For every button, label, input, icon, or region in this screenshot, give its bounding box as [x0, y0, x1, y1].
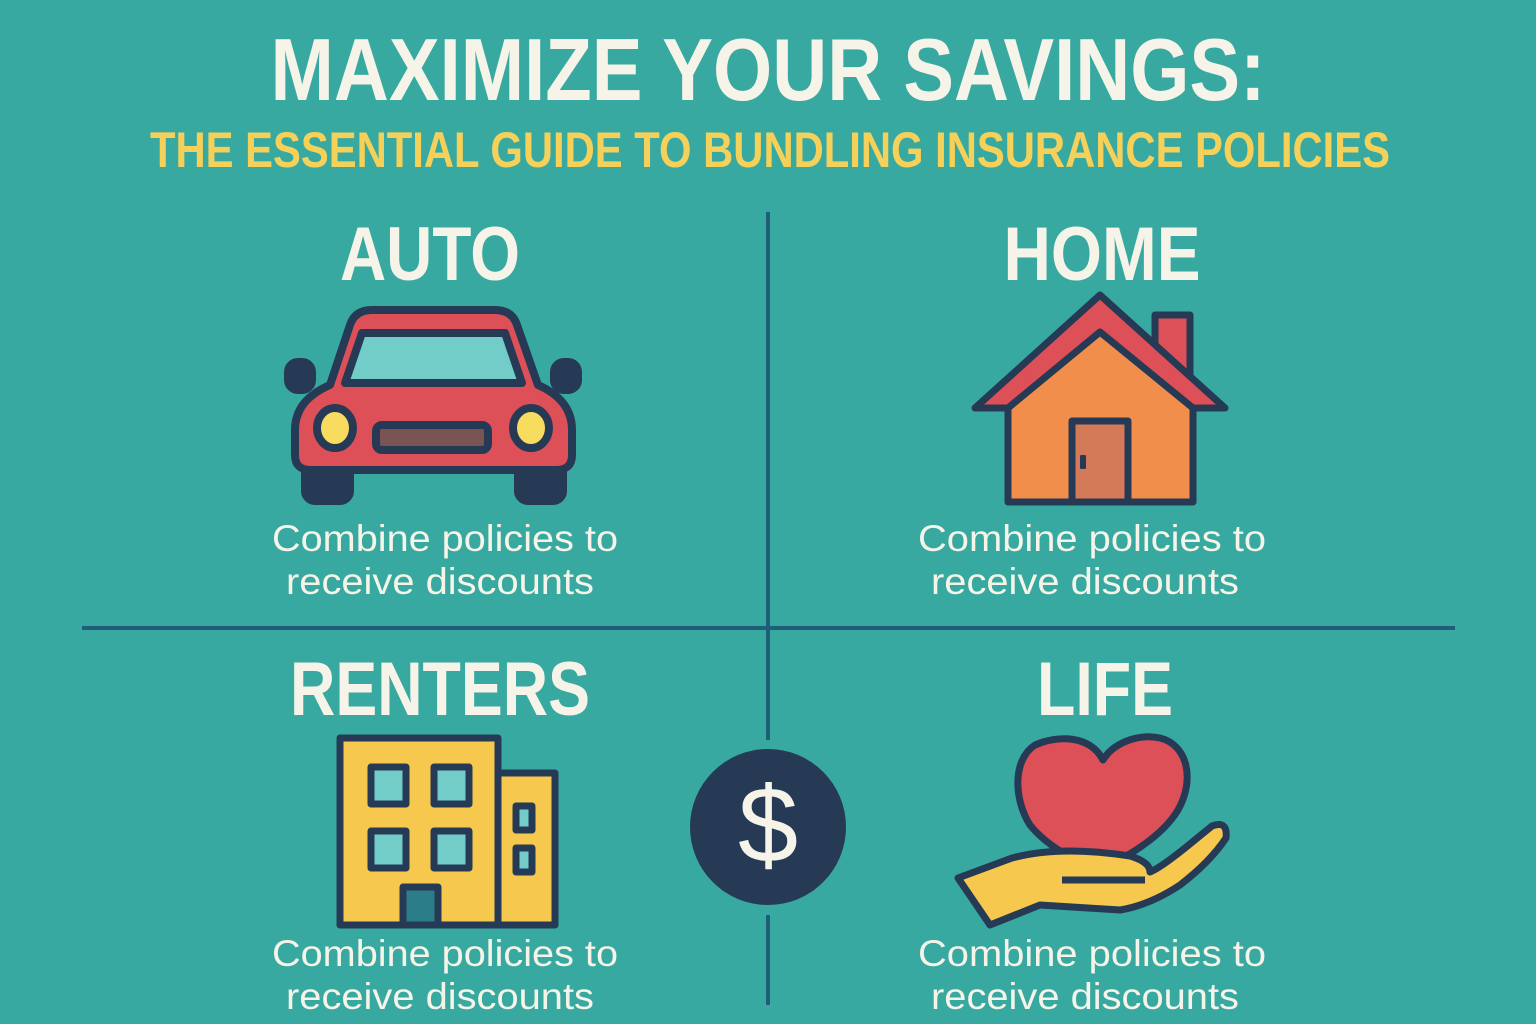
icon: heart in hand — [958, 737, 1226, 925]
text: home: Combine policies to — [918, 518, 1266, 559]
panel: home — [918, 212, 1266, 602]
icon: house — [975, 295, 1225, 502]
text: renters: Combine policies to — [272, 933, 618, 974]
icon: dollar circle — [690, 749, 846, 905]
panel: auto: receive discounts — [286, 561, 594, 602]
panel: life: receive discounts — [931, 976, 1239, 1017]
panel: life — [918, 647, 1266, 1017]
heading: home: HOME — [1004, 212, 1200, 297]
text: life: Combine policies to — [918, 933, 1266, 974]
icon: car — [288, 310, 578, 501]
icon: building — [340, 738, 555, 925]
icon: dollar circle: $ — [738, 764, 798, 885]
heading: life: LIFE — [1037, 647, 1173, 732]
text: auto: Combine policies to — [272, 518, 618, 559]
heading: renters: RENTERS — [290, 647, 590, 732]
heading: auto: AUTO — [340, 212, 520, 297]
panel: auto — [272, 212, 618, 602]
panel: renters — [272, 647, 618, 1017]
panel: renters: receive discounts — [286, 976, 594, 1017]
title: MAXIMIZE YOUR SAVINGS: — [270, 20, 1266, 119]
panel: home: receive discounts — [931, 561, 1239, 602]
